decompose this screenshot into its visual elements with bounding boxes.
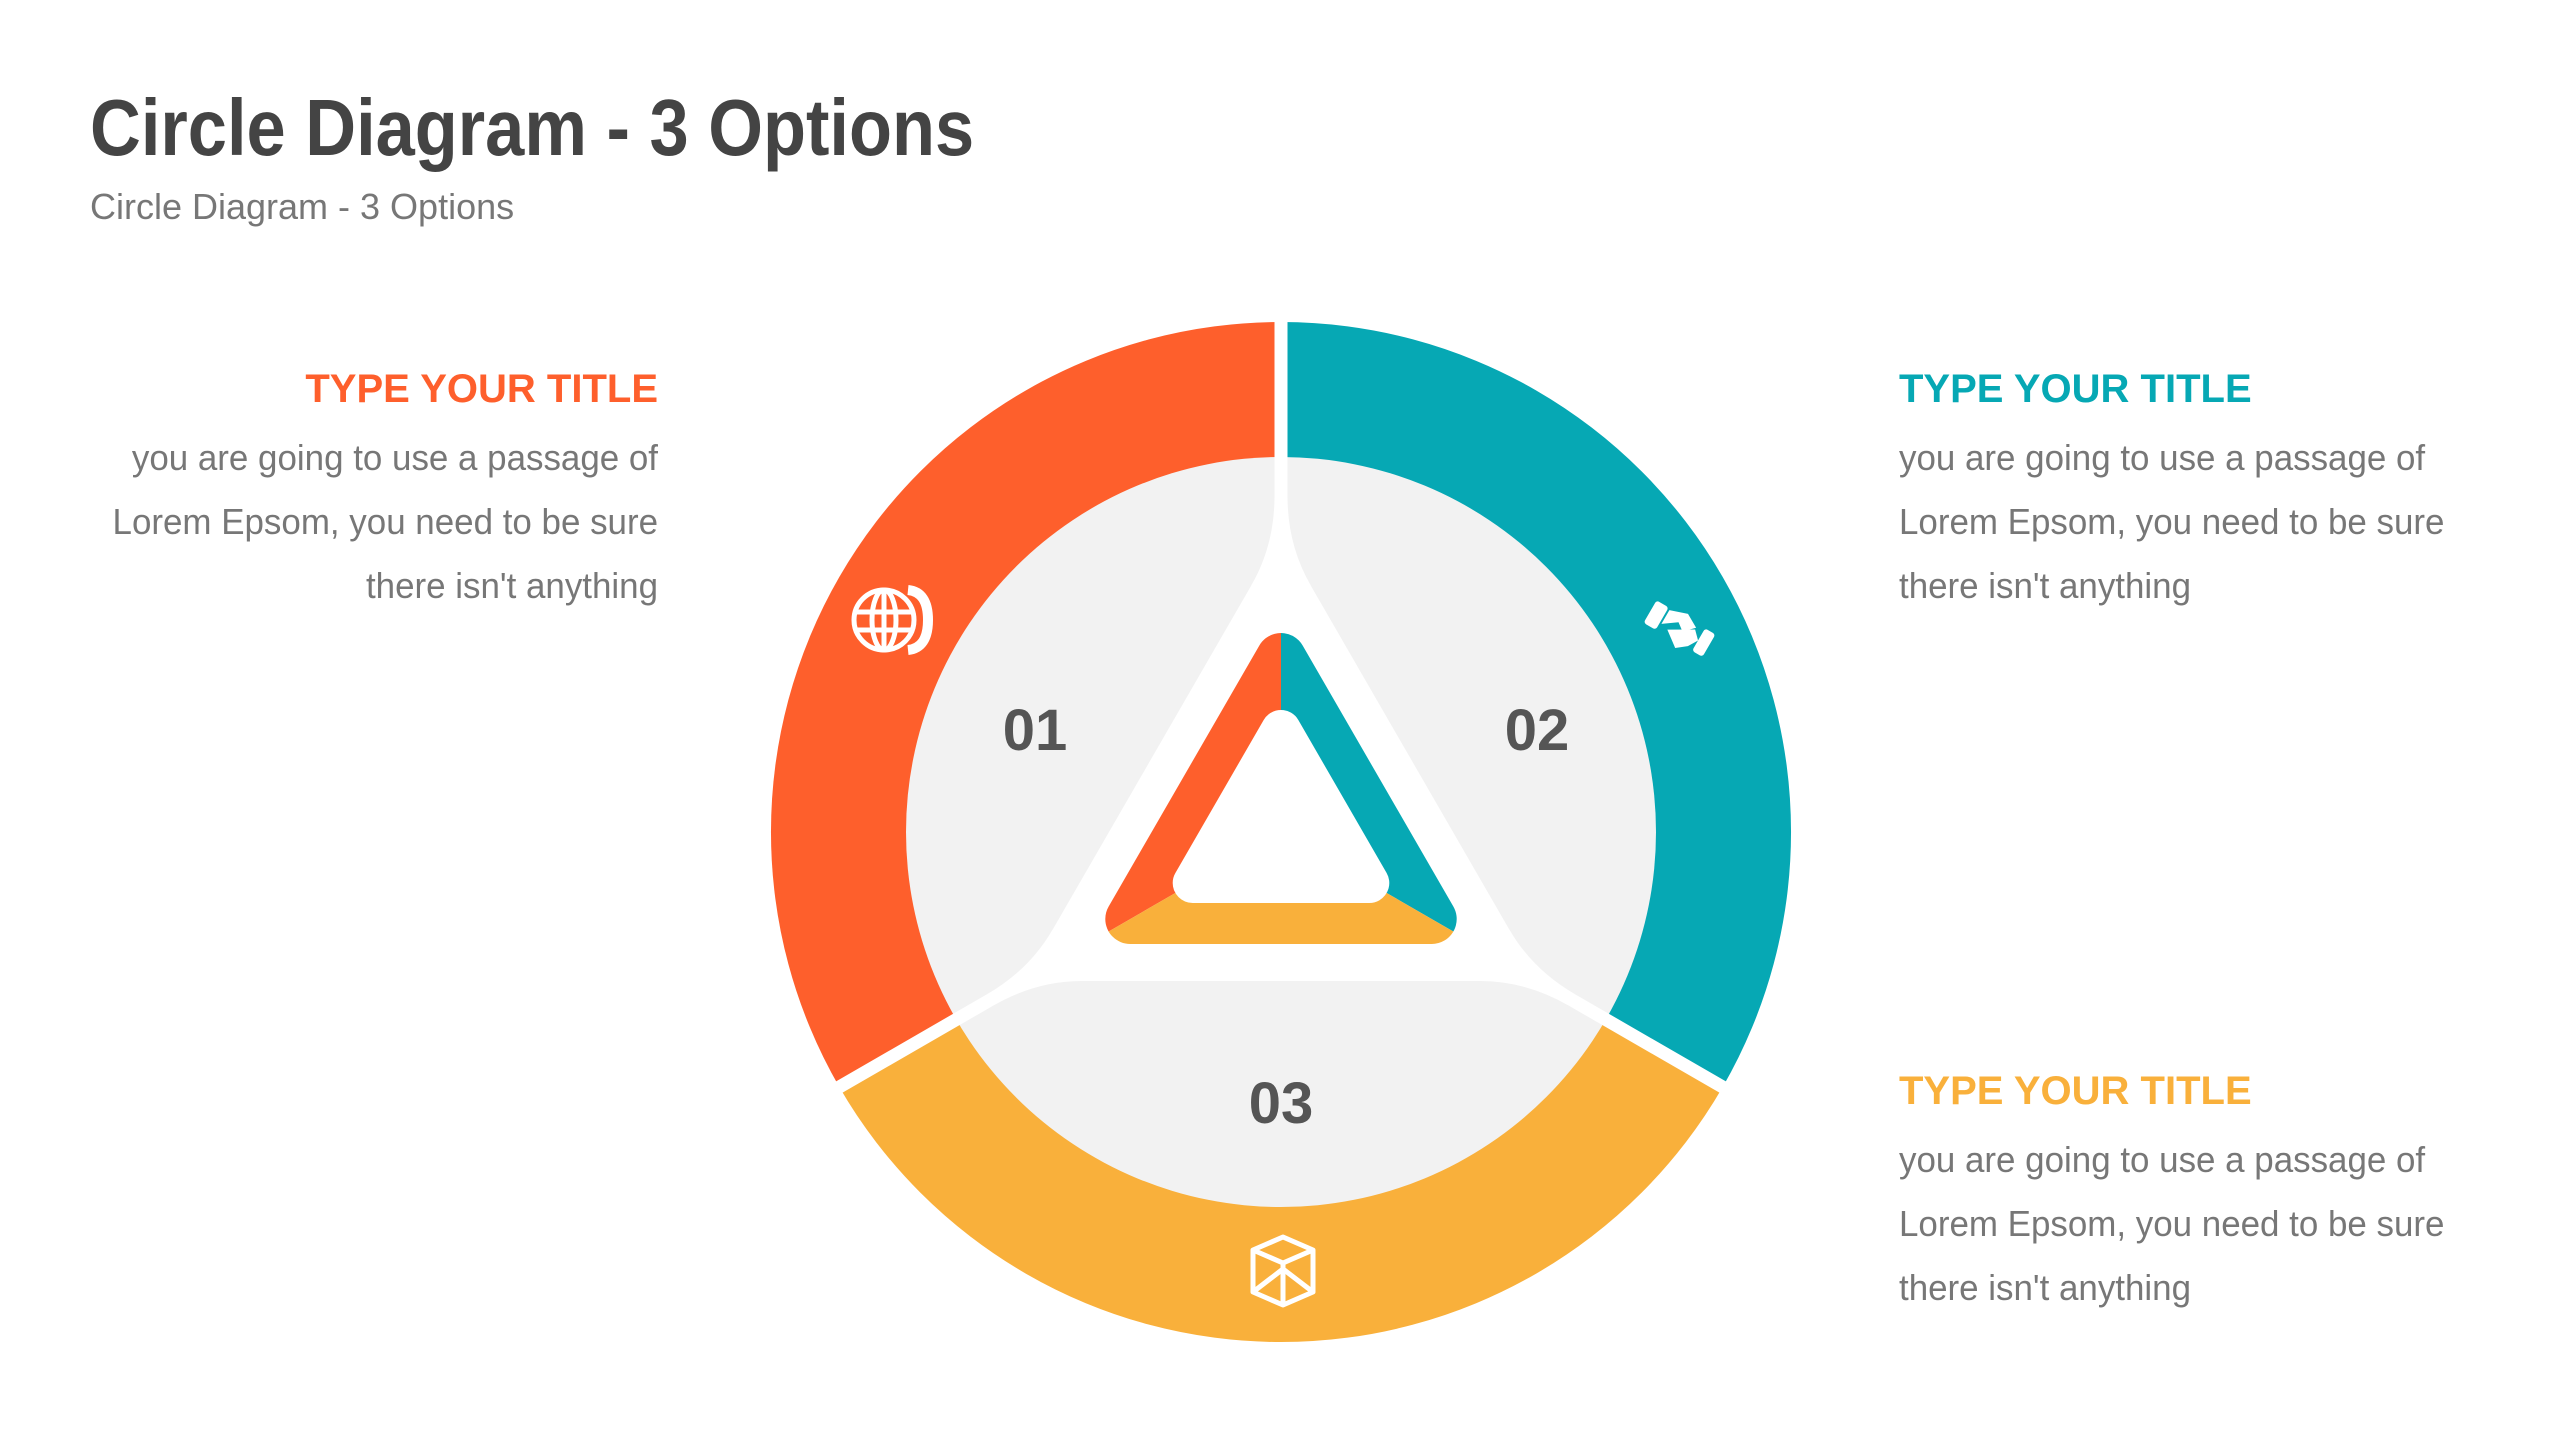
body: option 1: there isn't anything — [366, 565, 658, 606]
circle diagram — [770, 322, 1792, 1342]
body: option 1: Lorem Epsom, you need to be sure — [113, 501, 658, 542]
white channel right — [1480, 930, 1765, 1129]
body: option 2 — [1899, 437, 2444, 606]
body: option 3: Lorem Epsom, you need to be sure — [1899, 1203, 2444, 1244]
body: option 1: you are going to use a passage of — [132, 437, 658, 478]
heading: option 3: TYPE YOUR TITLE — [1899, 1069, 2252, 1113]
white channel left — [797, 930, 1082, 1129]
body: option 3: there isn't anything — [1899, 1267, 2191, 1308]
body: option 3 — [1899, 1139, 2444, 1308]
icon: globe phone — [854, 590, 928, 650]
heading: option 1: TYPE YOUR TITLE — [305, 367, 658, 411]
icon: handshake — [1641, 597, 1717, 662]
ring segment: orange 01 — [771, 322, 1281, 1087]
title: Circle Diagram - 3 Options — [90, 83, 974, 172]
label 02: 02 — [1505, 698, 1569, 763]
body: option 2: you are going to use a passage of — [1899, 437, 2425, 478]
label 01: 01 — [1003, 698, 1067, 763]
text block: option 1 — [113, 367, 658, 606]
ring segment: yellow 03 — [839, 832, 1723, 1342]
white central triangle — [1023, 534, 1539, 981]
body: option 1 — [113, 437, 658, 606]
text block: option 2 — [1899, 367, 2444, 606]
ring segment: teal 02 — [1281, 322, 1791, 1087]
white channel top — [1252, 290, 1310, 585]
inner gray disc — [906, 457, 1656, 1207]
subtitle: Circle Diagram - 3 Options — [90, 186, 514, 227]
center triangle — [1105, 633, 1457, 944]
body: option 2: there isn't anything — [1899, 565, 2191, 606]
text block: option 3 — [1899, 1069, 2444, 1308]
icon: box — [1253, 1237, 1313, 1305]
body: option 2: Lorem Epsom, you need to be sure — [1899, 501, 2444, 542]
heading: option 2: TYPE YOUR TITLE — [1899, 367, 2252, 411]
body: option 3: you are going to use a passage of — [1899, 1139, 2425, 1180]
label 03: 03 — [1249, 1071, 1313, 1136]
